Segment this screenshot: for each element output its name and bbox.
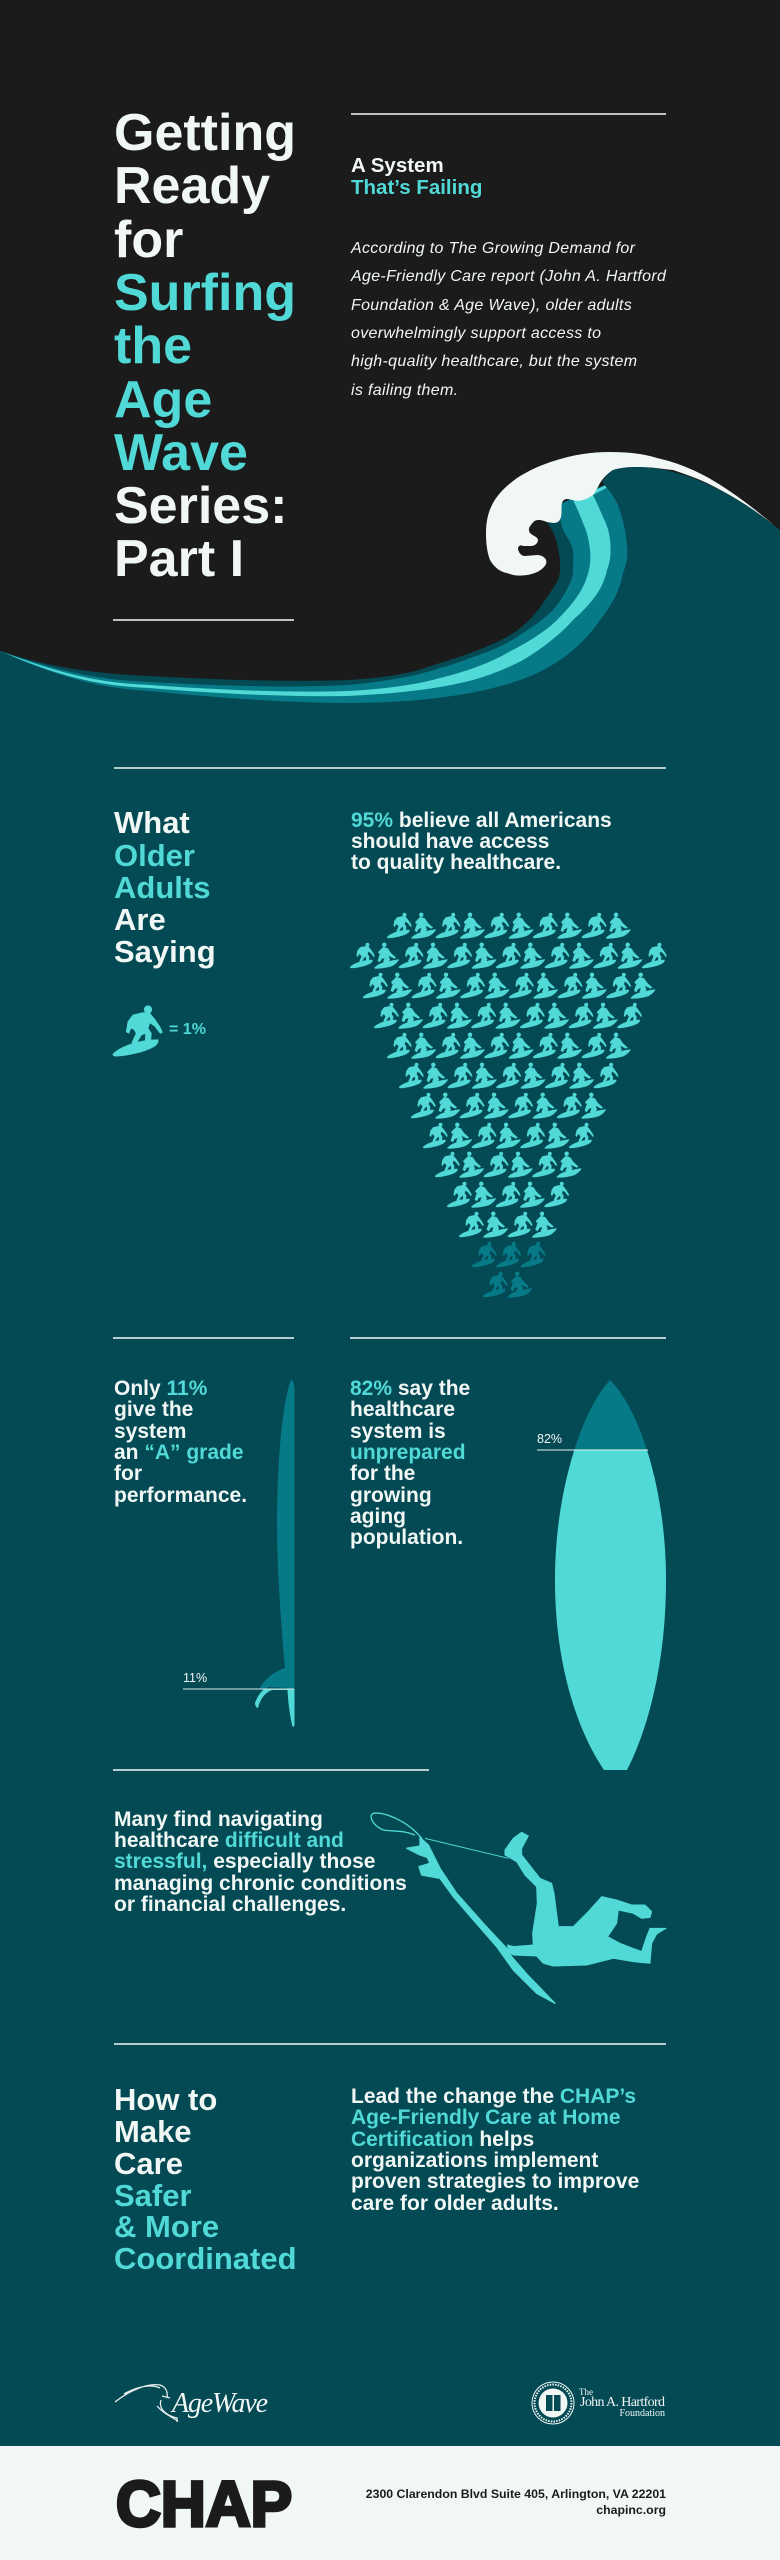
subheading: a system that's failing: A System <box>351 154 444 177</box>
heading: what older adults are saying: Are <box>114 902 166 937</box>
footer address: chapinc.org <box>596 2503 666 2517</box>
title: Surfing <box>114 264 296 322</box>
title: Wave <box>114 424 248 482</box>
chart: thin surfboard 11 percent filled <box>183 1380 294 1727</box>
heading: what older adults are saying: Older <box>114 838 195 873</box>
title: the <box>114 317 192 375</box>
legend: surfer equals one percent <box>113 1006 206 1056</box>
statistic: only 11 percent: give the <box>114 1398 193 1421</box>
title: for <box>114 211 183 269</box>
title: Ready <box>114 157 270 215</box>
chart: thin surfboard 11 percent filled: 11% <box>183 1671 207 1685</box>
heading: how to make care safer and more coordinated: & More <box>114 2209 219 2244</box>
text: lead the change: Certification helps <box>351 2128 534 2151</box>
legend: surfer equals one percent: = 1% <box>169 1021 206 1038</box>
icon: surfer wiping out with leashed board <box>371 1813 666 2003</box>
text: lead the change: Age-Friendly Care at Home <box>351 2106 621 2129</box>
statistic: 95 percent <box>351 809 612 874</box>
heading: how to make care safer and more coordinated: Coordinated <box>114 2241 297 2276</box>
statistic: 95 percent: to quality healthcare. <box>351 851 561 874</box>
statistic: only 11 percent <box>114 1377 247 1507</box>
wave illustration <box>0 452 780 760</box>
heading: what older adults are saying: What <box>114 805 190 840</box>
statistic: 82 percent: aging <box>350 1505 406 1528</box>
intro paragraph <box>350 240 667 399</box>
chart: wide surfboard 82 percent filled <box>537 1380 666 1770</box>
statistic: 82 percent: population. <box>350 1526 463 1549</box>
subheading: a system that's failing <box>351 154 482 199</box>
wave foam <box>486 452 775 576</box>
intro paragraph: According to The Growing Demand for <box>350 240 636 257</box>
logo: Age Wave <box>115 2385 268 2422</box>
heading: how to make care safer and more coordinated: Safer <box>114 2178 192 2213</box>
intro paragraph: is failing them. <box>351 382 458 399</box>
dark header background <box>0 0 780 760</box>
heading: how to make care safer and more coordinated: How to <box>114 2082 217 2117</box>
footer address <box>366 2487 666 2517</box>
statistic: 82 percent <box>350 1377 470 1549</box>
statistic: only 11 percent: performance. <box>114 1484 247 1507</box>
intro paragraph: Age-Friendly Care report (John A. Hartford <box>350 268 667 285</box>
logo: Age Wave: AgeWave <box>170 2388 268 2419</box>
intro paragraph: Foundation & Age Wave), older adults <box>351 297 632 314</box>
statistic: 95 percent: 95% believe all Americans <box>351 809 612 832</box>
text: lead the change: organizations implement <box>351 2149 598 2172</box>
text: navigating healthcare: or financial challenges. <box>114 1893 346 1916</box>
title: Getting <box>114 104 296 162</box>
subheading: a system that's failing: That’s Failing <box>351 176 482 199</box>
text: lead the change <box>351 2085 639 2215</box>
heading: what older adults are saying <box>114 805 216 969</box>
text: navigating healthcare <box>114 1808 407 1916</box>
heading: how to make care safer and more coordinated <box>114 2082 297 2276</box>
heading: what older adults are saying: Adults <box>114 870 210 905</box>
statistic: 82 percent: growing <box>350 1484 432 1507</box>
title: Part I <box>114 530 244 588</box>
intro paragraph: overwhelmingly support access to <box>351 325 601 342</box>
text: navigating healthcare: stressful, especially those <box>114 1850 375 1873</box>
heading: how to make care safer and more coordinated: Care <box>114 2146 183 2181</box>
statistic: 82 percent: system is <box>350 1420 446 1443</box>
footer background <box>0 2446 780 2560</box>
statistic: 82 percent: healthcare <box>350 1398 455 1421</box>
logo: John A. Hartford Foundation: John A. Hartford <box>580 2395 665 2410</box>
heading: what older adults are saying: Saying <box>114 934 216 969</box>
statistic: 95 percent: should have access <box>351 830 549 853</box>
footer address: 2300 Clarendon Blvd Suite 405, Arlington, VA 22201 <box>366 2487 666 2501</box>
statistic: only 11 percent: Only 11% <box>114 1377 208 1400</box>
teal body background <box>0 700 780 2450</box>
text: lead the change: Lead the change the CHAP’s <box>351 2085 636 2108</box>
text: lead the change: care for older adults. <box>351 2192 559 2215</box>
logo: John A. Hartford Foundation: Foundation <box>619 2408 665 2419</box>
statistic: only 11 percent: for <box>114 1462 142 1485</box>
title: Age <box>114 371 212 429</box>
statistic: only 11 percent: system <box>114 1420 186 1443</box>
text: navigating healthcare: healthcare difficult and <box>114 1829 344 1852</box>
pictogram: 100 surfers, 95 highlighted <box>350 913 667 1298</box>
statistic: 82 percent: for the <box>350 1462 415 1485</box>
intro paragraph: high-quality healthcare, but the system <box>351 353 637 370</box>
heading: how to make care safer and more coordinated: Make <box>114 2114 192 2149</box>
text: lead the change: proven strategies to improve <box>351 2170 639 2193</box>
logo: John A. Hartford Foundation <box>532 2382 665 2424</box>
title <box>114 104 296 588</box>
statistic: only 11 percent: an “A” grade <box>114 1441 244 1464</box>
text: navigating healthcare: Many find navigating <box>114 1808 323 1831</box>
statistic: 82 percent: unprepared <box>350 1441 466 1464</box>
chart: wide surfboard 82 percent filled: 82% <box>537 1432 562 1446</box>
statistic: 82 percent: 82% say the <box>350 1377 470 1400</box>
title: Series: <box>114 477 287 535</box>
text: navigating healthcare: managing chronic conditions <box>114 1872 407 1895</box>
logo: CHAP: CHAP <box>116 2468 292 2540</box>
logo: John A. Hartford Foundation: The <box>579 2387 593 2397</box>
